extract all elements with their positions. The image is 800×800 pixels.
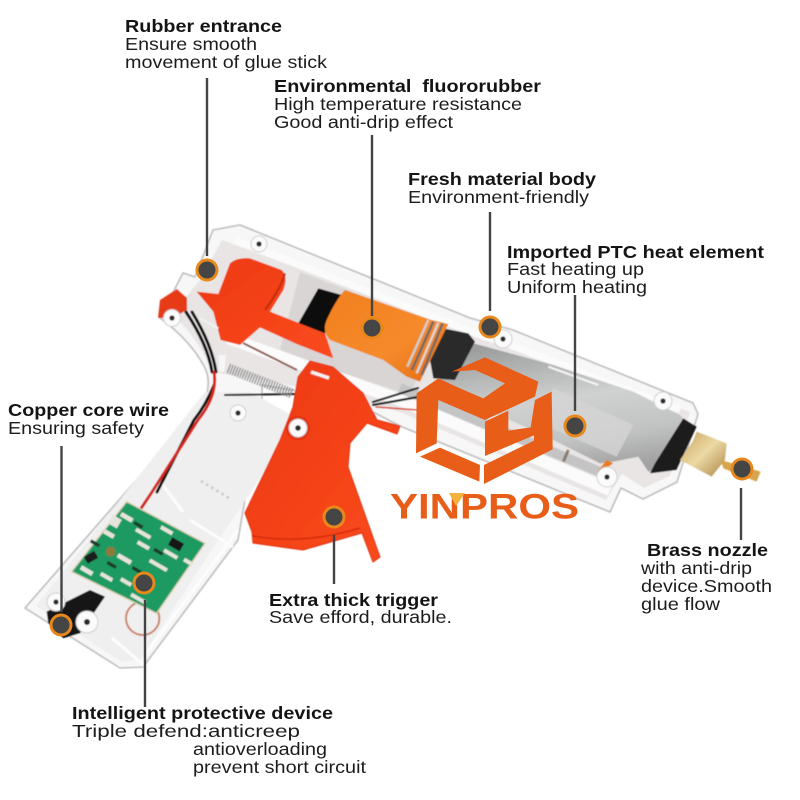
gun shell (25, 225, 698, 668)
circuit board (72, 502, 205, 613)
marker: body (478, 316, 502, 338)
black wires (186, 312, 212, 372)
trigger lower rim (253, 528, 360, 539)
logo mark (416, 357, 553, 484)
lever and finger loop (197, 258, 333, 358)
label: copper core wire: Copper core wire (8, 400, 169, 420)
label: PTC heat element: Fast heating up (507, 259, 644, 279)
vent dots (201, 481, 229, 498)
boss 7 (597, 467, 617, 487)
label: brass nozzle: glue flow (641, 594, 720, 614)
label: environmental fluororubber: Good anti-drip effect (274, 112, 453, 132)
black collar (650, 418, 697, 473)
label: extra thick trigger: Extra thick trigger (269, 590, 438, 610)
capacitor (106, 547, 116, 557)
label: extra thick trigger (269, 590, 452, 627)
label: fresh material body: Fresh material body (408, 169, 596, 189)
front assembly, drawn in zoom coordinates (197, 258, 448, 393)
small sensor (563, 450, 568, 462)
lever shade (265, 273, 285, 310)
orange clip (597, 460, 613, 472)
label: brass nozzle: with anti-drip (640, 558, 752, 578)
label: environmental fluororubber (274, 76, 541, 132)
label: rubber entrance: Rubber entrance (125, 16, 282, 36)
black spacer (298, 288, 342, 333)
orange cylinder (325, 290, 448, 382)
glue gun illustration (25, 225, 761, 668)
handle interior (36, 392, 300, 662)
label: PTC heat element (507, 242, 764, 297)
boss 9 (47, 593, 65, 611)
lever slot (200, 318, 218, 328)
guide rod (243, 343, 297, 370)
marker: brass nozzle (730, 458, 754, 480)
boss 5 (494, 330, 512, 348)
spring post (218, 355, 226, 372)
label: fresh material body: Environment-friendly (408, 187, 589, 207)
label: rubber entrance: Ensure smooth (125, 34, 257, 54)
chip (168, 537, 184, 551)
boss 8 (76, 611, 98, 633)
marker: protective device (132, 572, 156, 594)
label: intelligent protective device: antioverloading (193, 739, 327, 759)
boss 6 (654, 392, 672, 410)
boss 4 (286, 416, 310, 440)
label: rubber entrance: movement of glue stick (125, 52, 327, 72)
logo bottom left (420, 448, 480, 482)
logo wordmark: YINPROS (390, 488, 579, 526)
label: fresh material body (408, 169, 596, 207)
black switch (47, 590, 105, 638)
copper loop (126, 602, 159, 635)
heat element (433, 343, 690, 472)
lower rail (228, 338, 610, 490)
marker: copper wire (50, 614, 72, 636)
label: copper core wire: Ensuring safety (8, 418, 144, 438)
label: intelligent protective device (72, 703, 366, 777)
marker: rubber entrance (196, 258, 218, 282)
leader lines (62, 78, 741, 707)
boss 2 (164, 310, 180, 326)
marker: trigger (322, 506, 346, 528)
wires (120, 312, 418, 540)
board components (80, 512, 194, 605)
label: environmental fluororubber: High temperature resistance (274, 94, 522, 114)
label: PTC heat element: Uniform heating (507, 277, 647, 297)
link wires to barrel (373, 388, 418, 405)
element panel (540, 388, 633, 457)
label: brass nozzle: device.Smooth (641, 576, 772, 596)
label: extra thick trigger: Save efford, durable. (269, 607, 452, 627)
chip small (84, 551, 98, 564)
trigger slot (311, 372, 329, 378)
spring (228, 368, 292, 393)
barrel, drawn in zoom coordinates (430, 328, 761, 482)
label: brass nozzle: Brass nozzle (647, 540, 768, 560)
heat element slot (548, 367, 598, 385)
label: intelligent protective device: prevent short circuit (193, 757, 366, 777)
screw bosses (47, 236, 672, 633)
brass hex (680, 432, 727, 477)
handle ribs (112, 481, 238, 666)
body interior (172, 240, 690, 500)
trigger (245, 361, 400, 562)
red front latch (158, 289, 187, 318)
label: PTC heat element: Imported PTC heat element (507, 242, 764, 262)
control area (47, 502, 205, 638)
lower rail shadow (400, 388, 600, 472)
marker: heat element (564, 414, 586, 438)
label: rubber entrance (125, 16, 327, 72)
label: intelligent protective device: Triple defend:anticreep (72, 721, 300, 741)
logo accent triangle (449, 493, 465, 506)
boss 1 (251, 236, 267, 252)
red wire (120, 372, 215, 540)
label: intelligent protective device: Intelligent protective device (72, 703, 333, 723)
label: brass nozzle (640, 540, 772, 614)
interior shadow band (280, 272, 440, 395)
brass tip (721, 460, 761, 482)
rubber ring (430, 328, 475, 380)
logo right piece (484, 392, 553, 484)
boss 3 (230, 405, 246, 421)
upper rib highlight (235, 240, 680, 410)
coil rings (407, 320, 443, 375)
label: copper core wire (8, 400, 169, 438)
logo left wall and top band (416, 357, 538, 453)
label: environmental fluororubber: Environmental fluororubber (274, 76, 541, 96)
marker: fluororubber (360, 316, 384, 340)
